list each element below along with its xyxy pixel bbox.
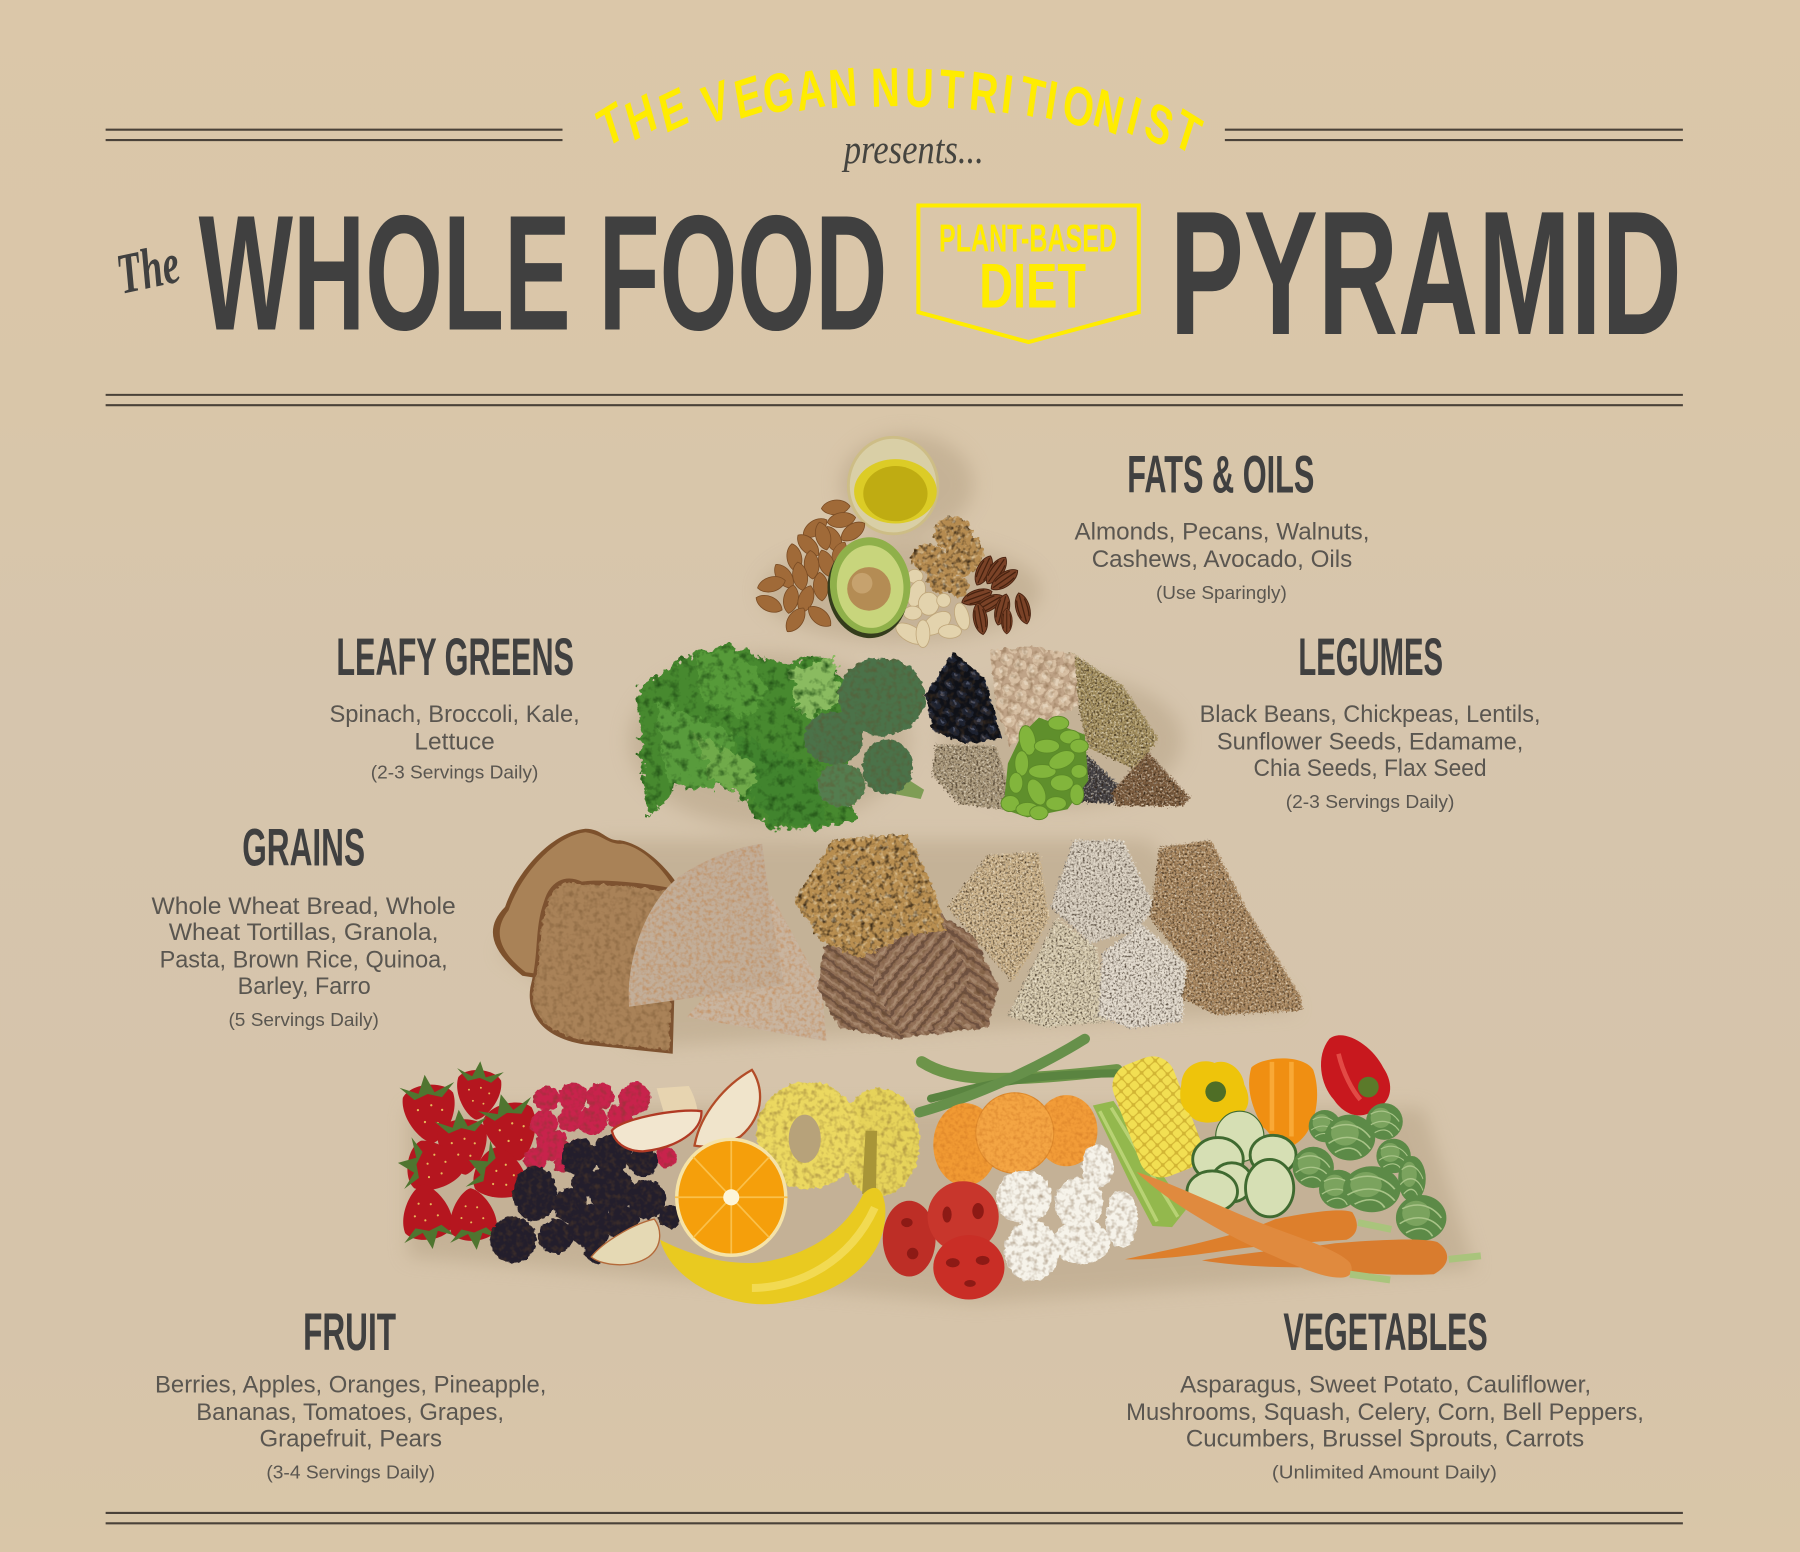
icon: lentils <box>1070 652 1158 770</box>
icon: flax seeds <box>1111 752 1190 806</box>
badge: plant-based diet: DIET <box>979 252 1086 322</box>
rules: bottom <box>106 1513 1683 1523</box>
section: fruit <box>155 1303 546 1483</box>
icon: orange slice <box>675 1138 788 1257</box>
icon: rotini pasta <box>817 907 999 1039</box>
food list: Chia Seeds, Flax Seed <box>1254 755 1487 782</box>
icon: cucumbers <box>1187 1111 1296 1217</box>
heading: FATS & OILS <box>1127 445 1314 504</box>
food tier: fats and oils <box>753 437 1034 649</box>
food list: Pasta, Brown Rice, Quinoa, <box>160 947 448 974</box>
rules: top right <box>1225 130 1683 140</box>
food list <box>1200 701 1541 782</box>
serving note: (5 Servings Daily) <box>228 1009 379 1030</box>
icon: avocado <box>821 535 914 643</box>
badge: plant-based diet: PLANT-BASED <box>939 217 1117 260</box>
icon: cauliflower <box>996 1144 1138 1281</box>
serving note: (2-3 Servings Daily) <box>371 761 538 782</box>
icon: barley <box>1050 840 1155 944</box>
food list: Wheat Tortillas, Granola, <box>169 919 439 946</box>
title words: whole food: WHOLE FOOD <box>199 180 887 364</box>
heading: VEGETABLES <box>1283 1303 1488 1362</box>
icon: black beans <box>925 652 1002 744</box>
soft shadows under food <box>408 434 1475 1303</box>
icon: sunflower seeds <box>932 744 1010 809</box>
brand: arched heading: THE VEGAN NUTRITIONIST <box>591 57 1207 168</box>
food list <box>1074 519 1370 573</box>
food list <box>1126 1371 1644 1452</box>
icon: chickpeas <box>990 646 1079 746</box>
icon: apple slices <box>591 1070 760 1265</box>
food list: Cashews, Avocado, Oils <box>1092 546 1352 573</box>
icon: sweet potatoes <box>933 1093 1097 1186</box>
food list: Barley, Farro <box>238 973 371 1000</box>
icon: oats <box>1099 924 1186 1029</box>
section: vegetables <box>1126 1303 1644 1483</box>
heading: LEGUMES <box>1298 628 1443 687</box>
icon: bread slices <box>493 829 677 1054</box>
icon: brown rice <box>947 852 1049 981</box>
icon: chia seeds <box>1072 752 1125 804</box>
icon: walnuts <box>911 517 984 597</box>
serving note: (3-4 Servings Daily) <box>266 1462 435 1483</box>
section: grains <box>152 819 456 1030</box>
icon: lettuce <box>638 645 855 829</box>
title word: The: The <box>111 232 185 307</box>
food tier: grains <box>493 829 1303 1054</box>
icon: granola <box>794 833 946 959</box>
icon: asparagus <box>920 1039 1117 1112</box>
food tier: fruit <box>394 1059 920 1304</box>
food tier: vegetables <box>883 1035 1481 1299</box>
icon: blackberries <box>490 1134 682 1264</box>
food list <box>155 1371 546 1452</box>
icon: edamame <box>1001 716 1088 820</box>
icon: cashews <box>892 569 972 649</box>
food list: Spinach, Broccoli, Kale, <box>329 701 580 728</box>
icon: brussels sprouts <box>1293 1103 1446 1241</box>
food list: Asparagus, Sweet Potato, Cauliflower, <box>1180 1371 1591 1398</box>
icon: pineapple rings <box>757 1081 920 1196</box>
icon: raspberries <box>523 1082 676 1172</box>
icon: bell peppers <box>1180 1035 1390 1147</box>
food list: Almonds, Pecans, Walnuts, <box>1074 519 1370 546</box>
heading: GRAINS <box>242 819 365 878</box>
section: leafy greens <box>329 628 580 782</box>
food list <box>329 701 580 756</box>
badge: plant-based diet <box>918 205 1139 342</box>
serving note: (2-3 Servings Daily) <box>1286 791 1454 812</box>
food list: Black Beans, Chickpeas, Lentils, <box>1200 701 1541 728</box>
icon: pecans <box>959 553 1034 636</box>
food list: Berries, Apples, Oranges, Pineapple, <box>155 1371 546 1398</box>
heading: FRUIT <box>303 1303 396 1362</box>
food list: Sunflower Seeds, Edamame, <box>1217 729 1523 756</box>
title <box>111 175 1682 372</box>
serving note: (Use Sparingly) <box>1156 582 1287 603</box>
rules: under title <box>106 395 1683 405</box>
food list: Grapefruit, Pears <box>259 1425 442 1452</box>
icon: corn <box>1106 1050 1209 1184</box>
food list: Lettuce <box>414 729 495 756</box>
icon: broccoli <box>804 658 925 807</box>
icon: strawberries <box>394 1059 546 1253</box>
serving note: (Unlimited Amount Daily) <box>1272 1462 1497 1483</box>
heading: LEAFY GREENS <box>336 628 574 687</box>
icon: tomato slices <box>883 1181 1004 1299</box>
section: legumes <box>1200 628 1541 812</box>
icon: quinoa <box>1008 918 1108 1027</box>
icon: olive oil bowl <box>848 437 938 534</box>
rules: top left <box>106 130 563 140</box>
icon: almonds <box>753 499 869 636</box>
icon: tortillas <box>629 844 827 1041</box>
subheading: presents: presents... <box>841 126 984 172</box>
icon: celery <box>1093 1101 1186 1227</box>
food list: Cucumbers, Brussel Sprouts, Carrots <box>1186 1425 1584 1452</box>
icon: banana <box>660 1131 885 1304</box>
icon: carrots <box>1125 1172 1481 1280</box>
food list: Mushrooms, Squash, Celery, Corn, Bell Peppers, <box>1126 1399 1644 1426</box>
food list: Whole Wheat Bread, Whole <box>152 893 456 920</box>
food list: Bananas, Tomatoes, Grapes, <box>196 1399 504 1426</box>
icon: farro <box>1150 840 1303 1015</box>
section: fats and oils <box>1074 445 1370 603</box>
food tier: leafy greens and legumes <box>638 645 1190 829</box>
food list <box>152 893 456 1000</box>
